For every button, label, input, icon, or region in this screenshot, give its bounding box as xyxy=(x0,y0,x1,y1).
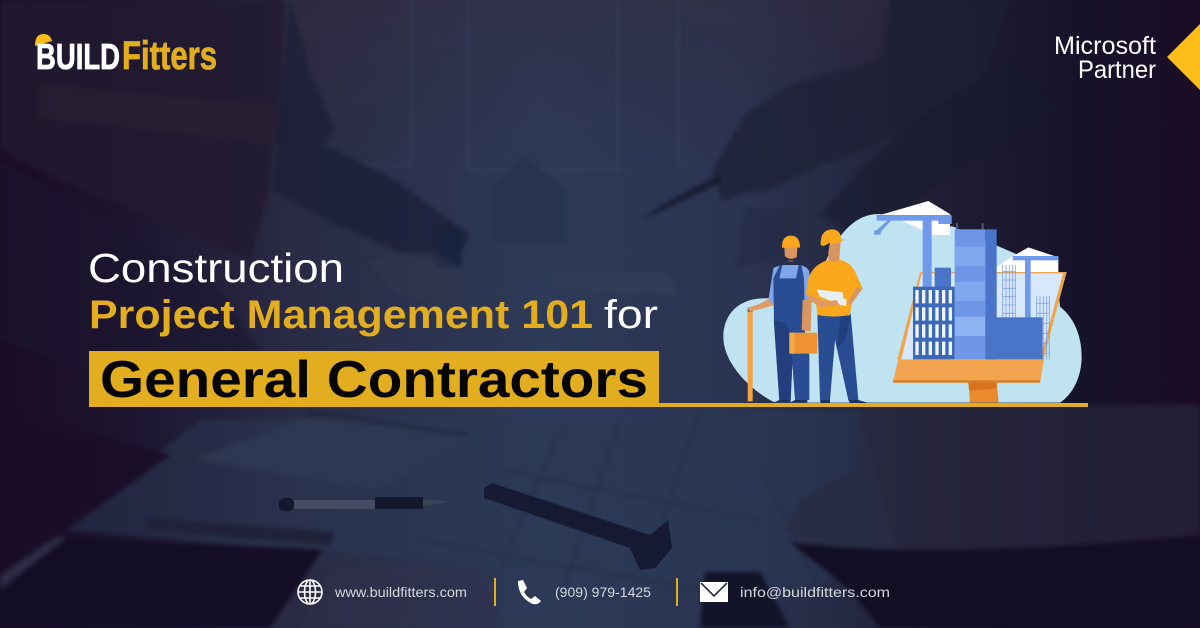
heading line 2: Project Management 101 xyxy=(89,293,593,337)
ground line xyxy=(658,403,1088,407)
logo: BuildFitters xyxy=(35,34,217,78)
heading line 3: highlighted band: General Contractors xyxy=(100,351,648,409)
house model xyxy=(487,154,565,242)
worker right xyxy=(806,229,868,403)
email: info@buildfitters.com xyxy=(740,584,890,600)
pen xyxy=(279,497,450,511)
icon: phone xyxy=(518,580,541,604)
laptop xyxy=(735,208,800,268)
heading line 2: for xyxy=(604,293,658,337)
scaffold towers xyxy=(1003,265,1049,359)
vest on left worker xyxy=(0,0,285,260)
right hand xyxy=(712,0,1010,202)
blueprints lines xyxy=(420,410,820,600)
tablet xyxy=(0,537,326,628)
icon: envelope xyxy=(700,582,728,602)
hard hat xyxy=(786,405,1200,552)
logo: BuildFitters: BUILD xyxy=(36,36,120,77)
logo: BuildFitters: Fitters xyxy=(122,34,217,78)
heading line 1: Construction xyxy=(88,245,344,291)
badge: Microsoft Partner xyxy=(1054,24,1200,90)
toolbox xyxy=(789,333,817,354)
left dark corner xyxy=(0,410,170,585)
title xyxy=(88,245,659,409)
footer contact bar xyxy=(298,578,890,606)
windowed building xyxy=(913,268,955,359)
website: www.buildfitters.com xyxy=(334,584,467,600)
lower-left arm and glove xyxy=(0,160,260,400)
badge: Microsoft Partner: Partner xyxy=(1078,56,1156,84)
worker left xyxy=(747,236,817,403)
paper sheet xyxy=(60,410,900,590)
footer tones xyxy=(300,570,500,628)
icon: yellow diamond xyxy=(1167,24,1200,90)
calculator xyxy=(550,272,680,295)
phone number: (909) 979-1425 xyxy=(555,584,651,600)
illustration: workers and monitor city xyxy=(723,201,1082,403)
icon: yellow hard hat xyxy=(35,34,52,46)
icon: globe xyxy=(298,580,322,604)
tall tower xyxy=(955,223,1043,359)
cloud backdrop xyxy=(723,214,1082,403)
wrist and watch xyxy=(435,228,462,268)
hammer xyxy=(484,483,672,570)
notebook xyxy=(195,418,472,491)
window frames xyxy=(330,0,830,170)
right crane xyxy=(1013,256,1058,318)
helmet on desk xyxy=(365,250,510,310)
pencil xyxy=(642,175,722,220)
left arm xyxy=(272,0,470,265)
badge: Microsoft Partner: Microsoft xyxy=(1054,32,1156,60)
ruler xyxy=(145,518,335,545)
white snow peaks xyxy=(880,201,950,235)
dark table under hat xyxy=(790,538,1200,628)
monitor xyxy=(893,272,1067,403)
sleeve xyxy=(820,60,1060,240)
left crane xyxy=(874,215,952,288)
